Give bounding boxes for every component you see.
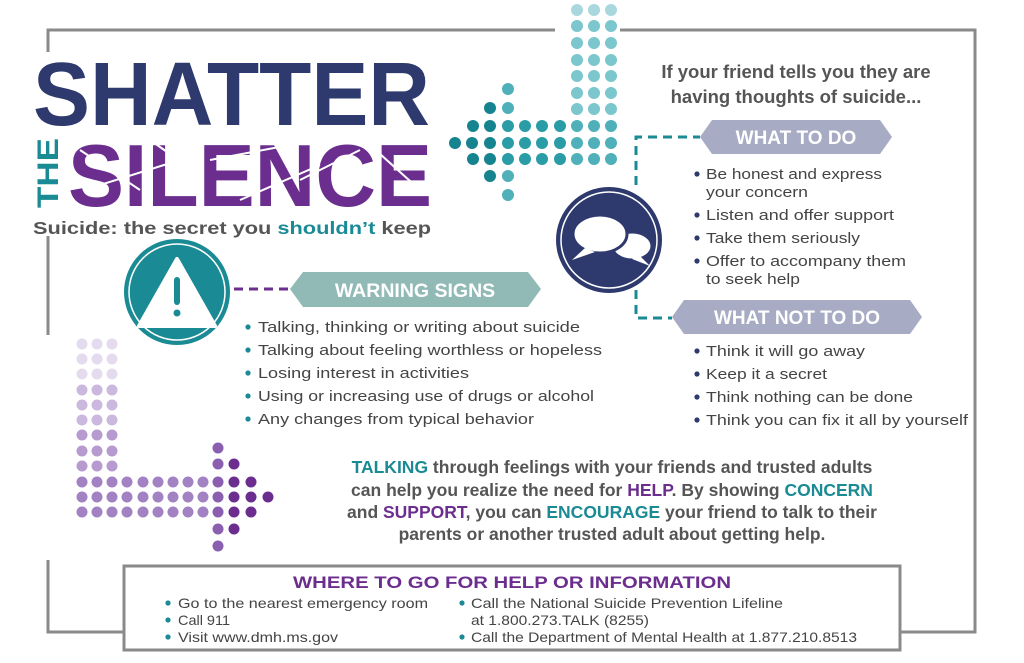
title: SILENCE [68,126,432,225]
help list: Call the Department of Mental Health at 1.877.210.8513 [471,629,857,645]
banner: warning signs: WARNING SIGNS [335,280,495,302]
intro heading: having thoughts of suicide... [671,86,921,107]
list: what not to do: Think it will go away [706,344,866,360]
list: what not to do [694,344,969,429]
connector: warning [234,288,290,290]
list: warning signs: Any changes from typical behavior [258,412,534,428]
title [32,45,432,225]
intro heading: If your friend tells you they are [661,61,931,82]
icon: warning [124,239,230,345]
banner: what to do [700,120,892,154]
icon: chat bubbles [556,187,662,293]
list: what to do: Be honest and express [706,167,882,183]
help box [124,566,900,650]
connector: chat to banners [636,137,700,318]
list: what not to do: Think you can fix it all by yourself [706,413,969,429]
teal dotted arrow [449,4,617,201]
list: warning signs: Losing interest in activities [258,366,469,382]
message paragraph: TALKING through feelings with your friends and trusted adults [352,457,873,477]
help list: Call 911 [178,612,230,628]
message paragraph: parents or another trusted adult about getting help. [399,524,825,544]
list: warning signs: Talking, thinking or writing about suicide [258,320,580,336]
list: warning signs: Talking about feeling worthless or hopeless [258,343,602,359]
banner: what to do: WHAT TO DO [736,128,856,149]
help list: Go to the nearest emergency room [178,595,428,611]
help box title: WHERE TO GO FOR HELP OR INFORMATION [293,573,731,592]
intro heading [661,61,931,107]
message paragraph [347,457,877,544]
banner: what not to do [672,300,922,334]
title: THE [32,138,65,208]
message paragraph: can help you realize the need for HELP. By showing CONCERN [351,480,873,500]
banner: warning signs [290,272,541,307]
help list [165,595,857,645]
help list: at 1.800.273.TALK (8255) [471,612,649,628]
list: what to do: Take them seriously [706,231,861,247]
list: what not to do: Think nothing can be done [706,390,913,406]
help list: Visit www.dmh.ms.gov [178,629,338,645]
purple dotted arrow [76,338,274,552]
list: warning signs [245,320,602,428]
list: what not to do: Keep it a secret [706,367,827,383]
banner: what not to do: WHAT NOT TO DO [714,308,880,329]
message paragraph: and SUPPORT, you can ENCOURAGE your friend to talk to their [347,502,877,522]
list: what to do: Offer to accompany them [706,254,906,270]
title: SHATTER [33,45,430,145]
list: what to do: to seek help [706,272,800,288]
list: warning signs: Using or increasing use of drugs or alcohol [258,389,594,405]
list: what to do: your concern [706,185,808,201]
list: what to do: Listen and offer support [706,208,894,224]
subtitle: Suicide: the secret you shouldn’t keep [33,218,431,238]
list: what to do [694,167,906,288]
help list: Call the National Suicide Prevention Lifeline [471,595,783,611]
